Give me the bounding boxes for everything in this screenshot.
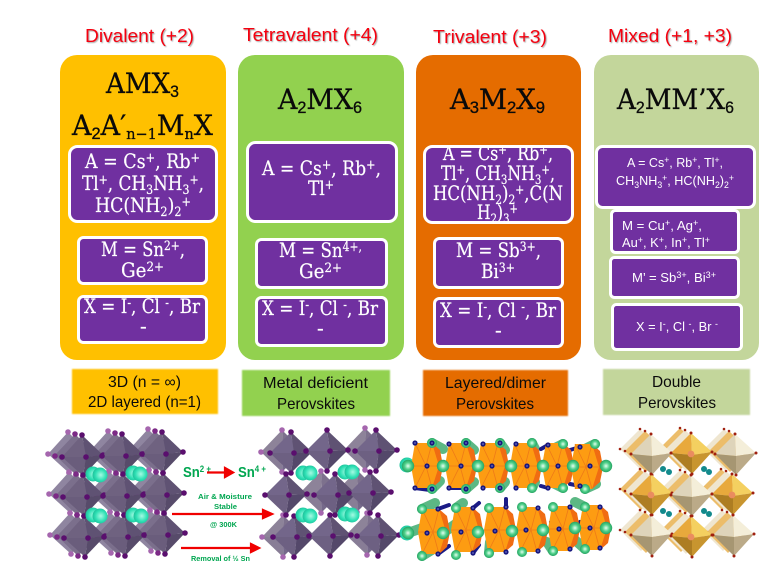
A site box: ,C(N — [524, 181, 563, 205]
A site box: + — [510, 202, 518, 217]
formula: A3M2X9: 3 — [470, 98, 479, 117]
A site box: , — [720, 155, 723, 170]
arrow: stability — [172, 510, 272, 518]
panel: trivalent column — [416, 27, 581, 416]
X site box: , Br — [692, 319, 715, 334]
M site box: + — [705, 235, 710, 245]
caption: dimensionality — [72, 369, 218, 414]
arrow: Sn removal — [181, 544, 259, 552]
M site box: , Tl — [687, 235, 705, 250]
A site box: NH — [153, 171, 182, 195]
X site box: - — [317, 316, 324, 340]
X site box: , Cl — [666, 319, 689, 334]
A site box: + — [498, 143, 507, 158]
M prime site box: 3+ — [706, 270, 716, 280]
formula: A3M2X9: A — [450, 83, 470, 116]
A site box: 3 — [634, 180, 639, 190]
formula: A2MM'X6: 6 — [725, 98, 734, 117]
formula: A2MM'X6: A — [617, 83, 637, 116]
X site box — [434, 298, 562, 346]
A site box: + — [146, 151, 155, 166]
label: Sn2+: Sn — [183, 464, 202, 481]
M site box: M = Sn — [101, 237, 178, 261]
A site box: + — [729, 173, 734, 183]
caption: layered/dimer — [423, 370, 568, 416]
X site box — [256, 296, 386, 346]
A site box: A = Cs — [443, 141, 512, 165]
conversion annotations: Sn2+ to Sn4+ — [172, 464, 272, 563]
A site box: + — [99, 173, 108, 188]
X site box: , Cl — [487, 298, 521, 322]
X site box: - — [483, 300, 487, 315]
formula: layered: A — [72, 109, 92, 142]
A site box: + — [189, 173, 199, 188]
M site box: , Ag — [670, 218, 693, 233]
X site box: - — [165, 296, 169, 311]
A site box: HC(NH — [95, 193, 170, 217]
M site box: + — [638, 235, 643, 245]
formula: A2MX6: 2 — [297, 98, 306, 117]
A site box: , — [199, 171, 204, 195]
caption: metal deficient: Metal deficient — [263, 375, 369, 392]
A site box: 2 — [508, 193, 515, 208]
M site box: , K — [643, 235, 659, 250]
label: removal of half Sn: Removal of ½ Sn — [191, 554, 250, 563]
A site box: + — [190, 151, 200, 166]
A site box: , Rb — [331, 156, 366, 180]
A site box — [596, 146, 754, 208]
M site box: Ge — [121, 258, 149, 282]
A site box: NH — [639, 173, 657, 188]
M site box: , In — [664, 235, 682, 250]
A site box: ) — [502, 181, 508, 205]
A site box: A = Cs — [262, 156, 331, 180]
label: air and moisture stable: Air & Moisture — [198, 492, 252, 501]
arrow: oxidation — [207, 468, 233, 477]
panel: tetravalent column — [238, 25, 404, 416]
crystal structure: double perovskite — [619, 427, 758, 558]
X site box: X = I — [262, 296, 314, 320]
A site box: CH — [616, 173, 635, 188]
heading: Divalent: Divalent (+2) — [85, 26, 194, 46]
formula: layered: n−1 — [126, 125, 157, 143]
crystal structure: layered dimer perovskite — [402, 438, 612, 561]
A site box: , Rb — [155, 149, 190, 173]
formula: layered: n — [184, 125, 194, 143]
panel: divalent column — [60, 26, 226, 414]
label: Sn4+: Sn — [238, 464, 257, 481]
caption: metal deficient: Perovskites — [277, 396, 355, 413]
A site box: , — [550, 161, 555, 185]
formula: A3M2X9: 2 — [507, 98, 516, 117]
A site box: 2 — [491, 212, 497, 227]
X site box: X = I — [636, 319, 663, 334]
A site box — [70, 146, 216, 222]
M site box: 2+ — [324, 261, 342, 276]
M site box: M = Sb — [456, 238, 532, 262]
A site box: + — [366, 158, 376, 173]
A site box: + — [541, 163, 550, 178]
X site box: , Br — [169, 294, 200, 318]
X site box — [612, 304, 742, 350]
M prime site box: M’ = Sb — [632, 270, 676, 285]
formula: layered: M — [157, 109, 184, 142]
M site box: + — [682, 235, 687, 245]
caption: double perovskites: Perovskites — [638, 395, 716, 412]
heading: Mixed: Mixed (+1, +3) — [608, 26, 732, 46]
conversion annotations: Sn2+ to Sn4+: Stable — [214, 502, 237, 511]
M site box: + — [659, 235, 664, 245]
A site box: ) — [497, 200, 503, 224]
A site box: + — [662, 173, 667, 183]
M site box: + — [693, 218, 698, 228]
M site box — [256, 238, 386, 288]
A site box: , — [376, 156, 381, 180]
M prime site box: 3+ — [676, 270, 687, 280]
X site box: , Cl — [309, 296, 343, 320]
M site box: Bi — [481, 259, 502, 283]
M site box: 2+ — [146, 260, 164, 275]
formula: A2MX6: A — [278, 83, 298, 116]
X site box: - — [495, 318, 502, 342]
M site box: 4+, — [343, 240, 362, 255]
heading: Trivalent: Trivalent (+3) — [433, 27, 547, 47]
A site box: + — [322, 158, 331, 173]
label: Sn2+: 2 + — [200, 464, 211, 474]
card background: mixed — [594, 55, 759, 360]
A site box: H — [477, 200, 494, 224]
A site box: Tl — [441, 161, 461, 185]
formula: layered: 2 — [91, 124, 101, 143]
A site box: Tl — [82, 171, 102, 195]
X site box: - — [521, 300, 525, 315]
A site box: 3 — [503, 212, 510, 227]
M site box: 2+ — [164, 239, 180, 254]
A site box: 3 — [535, 173, 541, 188]
A site box: 2 — [715, 180, 720, 190]
formula: A3M2X9: X — [516, 83, 536, 116]
M site box: , — [698, 218, 702, 233]
A site box: , HC(NH — [667, 173, 715, 188]
M site box: + — [665, 218, 670, 228]
X site box: - — [663, 319, 666, 329]
card background: divalent — [60, 55, 226, 360]
A site box: + — [325, 178, 334, 193]
X site box: - — [305, 298, 309, 313]
caption: dimensionality: 2D layered (n=1) — [88, 394, 201, 411]
formula: layered: A′ — [100, 109, 126, 142]
M site box: Ge — [299, 259, 327, 283]
X site box: - — [127, 296, 131, 311]
A site box: A = Cs — [85, 149, 154, 173]
A site box: NH — [507, 161, 535, 185]
X site box: , Cl — [131, 294, 165, 318]
M site box: 3+ — [520, 240, 536, 255]
A site box: , Tl — [697, 155, 715, 170]
A site box: + — [539, 143, 548, 158]
X site box — [78, 294, 206, 342]
A site box: 3 — [501, 173, 507, 188]
X site box: - — [140, 314, 147, 338]
M prime site box: , Bi — [687, 270, 706, 285]
A site box: , Rb — [669, 155, 692, 170]
X site box: , Br — [525, 298, 556, 322]
A site box: + — [457, 163, 465, 178]
caption: double perovskites: Double — [652, 374, 701, 391]
A site box — [248, 142, 396, 222]
X site box: X = I — [440, 298, 492, 322]
A site box: 3 — [146, 183, 153, 198]
A site box: + — [714, 155, 720, 165]
M site box: 3+ — [499, 261, 515, 276]
M site box: Au — [622, 235, 638, 250]
formula: A2MX6: 6 — [353, 98, 362, 117]
caption: layered/dimer: Perovskites — [456, 396, 534, 413]
X site box: - — [689, 319, 692, 329]
A site box: + — [664, 155, 669, 165]
M site box — [612, 210, 738, 252]
M site box: , — [536, 238, 541, 262]
label: temperature: @ 300K — [210, 520, 238, 529]
A site box: 2 — [174, 205, 182, 220]
formula: A3M2X9: 9 — [536, 98, 545, 117]
formula: A2MM'X6: 2 — [636, 98, 645, 117]
formula: AMX3: 3 — [170, 82, 179, 101]
A site box: 2 — [724, 180, 729, 190]
A site box: , — [548, 141, 553, 165]
A site box: + — [515, 183, 524, 198]
formula: A2MX6: MX — [306, 83, 353, 116]
X site box: X = I — [84, 294, 136, 318]
A site box: + — [182, 195, 191, 210]
M prime site box — [610, 258, 738, 298]
A site box: 3 — [657, 180, 662, 190]
A site box — [424, 141, 572, 227]
formula: AMX3: AMX — [106, 67, 175, 100]
X site box: - — [715, 319, 718, 329]
caption: dimensionality: 3D (n = ∞) — [108, 374, 181, 391]
A site box: + — [692, 155, 697, 165]
A site box: ) — [720, 173, 724, 188]
card background: tetravalent — [238, 55, 404, 360]
M site box — [78, 237, 206, 284]
panel: mixed column — [594, 26, 759, 415]
A site box: , CH — [465, 161, 501, 185]
card background: trivalent — [416, 55, 581, 360]
crystal structure: vacancy-ordered perovskite — [258, 425, 414, 560]
caption: metal deficient — [242, 370, 390, 416]
M site box: M = Cu — [622, 218, 664, 233]
M site box: M = Sn — [279, 238, 356, 262]
A site box: ) — [168, 193, 174, 217]
M site box: , — [180, 237, 185, 261]
X site box: - — [343, 298, 347, 313]
M site box — [434, 238, 562, 288]
A site box: , Rb — [507, 141, 539, 165]
heading: Tetravalent: Tetravalent (+4) — [243, 25, 378, 45]
A site box: A = Cs — [627, 155, 666, 170]
crystal structure: 3D tin perovskite — [45, 426, 188, 560]
caption: double perovskites — [603, 369, 750, 415]
A site box: Tl — [308, 176, 328, 200]
A site box: 2 — [495, 193, 502, 208]
X site box: , Br — [347, 296, 378, 320]
A site box: HC(NH — [433, 181, 508, 205]
formula: A2MM'X6: MM’X — [645, 83, 725, 116]
A site box: 3 — [182, 183, 189, 198]
A site box: , CH — [108, 171, 146, 195]
formula: layered: X — [194, 109, 213, 142]
A site box: 2 — [160, 205, 168, 220]
label: Sn4+: 4 + — [255, 464, 266, 474]
caption: layered/dimer: Layered/dimer — [445, 375, 547, 392]
formula: A3M2X9: M — [479, 83, 507, 116]
